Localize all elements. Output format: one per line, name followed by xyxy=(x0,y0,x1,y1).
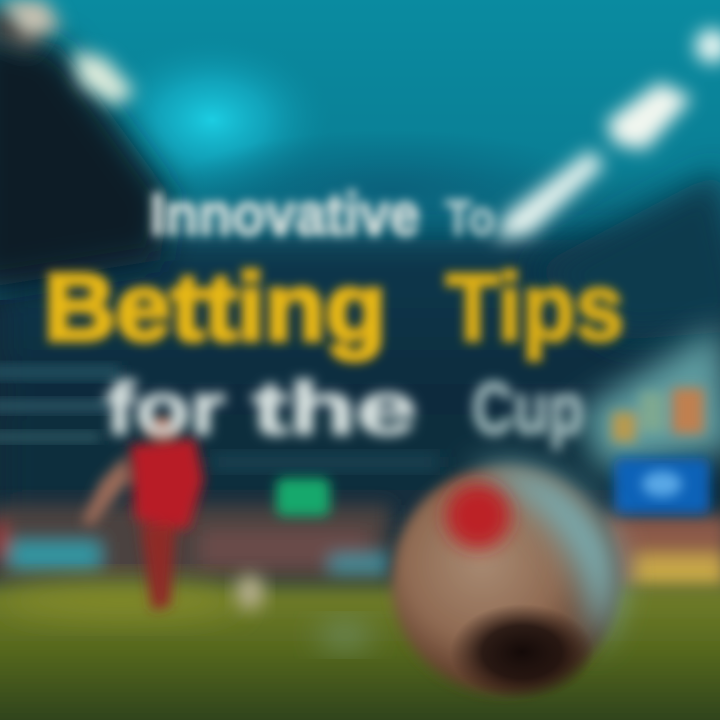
title line three xyxy=(105,367,584,450)
scoreboard flags, right xyxy=(612,388,704,442)
title line one: Innovative xyxy=(150,181,420,248)
player in red xyxy=(82,417,204,610)
title line two xyxy=(44,254,624,361)
blue badge xyxy=(614,458,710,514)
stadium lights xyxy=(0,0,720,240)
football xyxy=(391,465,619,700)
title small word: To xyxy=(445,190,495,246)
title line three: the xyxy=(252,367,417,450)
background: bright cyan glow xyxy=(92,35,610,250)
title line two: Betting xyxy=(44,254,386,361)
title line three: for xyxy=(105,367,225,450)
background: stadium stands xyxy=(0,5,720,540)
crowd band xyxy=(0,505,720,595)
title line two: Tips xyxy=(446,254,624,361)
small distant player on pitch xyxy=(236,574,264,610)
grass pitch xyxy=(0,582,720,720)
background: sky xyxy=(0,0,720,300)
title line three: Cup xyxy=(472,367,584,450)
green badge xyxy=(276,478,330,516)
